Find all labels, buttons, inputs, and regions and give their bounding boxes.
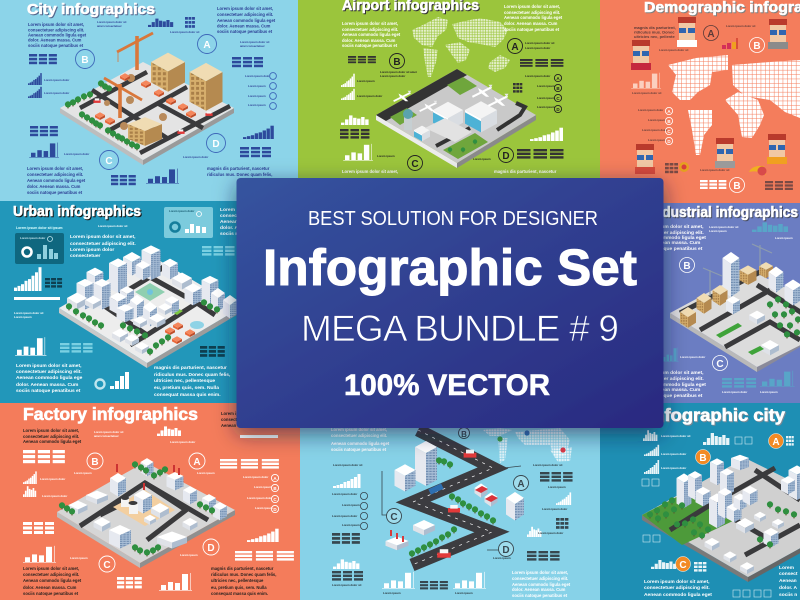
text blocks: Aenean commodo ligula eget	[27, 178, 86, 183]
light dashboard card: Lorem ipsum dolor	[169, 209, 195, 213]
text blocks: Lorem ipsum	[14, 315, 32, 319]
tiny icons and captions: Lorem ipsum dolor sit	[661, 434, 690, 438]
badge letters: D	[667, 139, 671, 144]
badge letters: C	[390, 512, 398, 523]
text blocks: Aenean commodo ligula eget	[23, 439, 82, 444]
text blocks: sociis natoque penatibus et	[638, 393, 703, 399]
tiny captions: Lorem ipsum dolor	[44, 78, 70, 82]
tiny captions: Lorem ipsum dolor	[44, 91, 70, 95]
dark tables	[332, 472, 573, 589]
orange badges	[676, 434, 784, 572]
text blocks: Lorem ipsum dolor sit amet,	[638, 370, 704, 376]
text blocks: Lorem ipsum dolor sit amet,	[638, 224, 704, 230]
tiny captions: Lorem ipsum dolor	[170, 440, 196, 444]
badge letters: C	[105, 156, 113, 167]
tiny captions: Lorem ipsum dolor sit	[94, 430, 123, 434]
circle badges	[87, 453, 279, 572]
text blocks: sociis natoque penatibus et	[23, 591, 79, 596]
text blocks: Lorem ipsum dolor sit ipsum	[16, 226, 63, 230]
badge letters: B	[81, 55, 89, 66]
tiny captions: Lorem ipsum dolor	[332, 492, 358, 496]
panel: urban infographics	[0, 201, 240, 403]
text blocks: Aenean commodo ligula eget	[504, 15, 563, 20]
avatar portraits	[631, 17, 788, 174]
text blocks: ultricies nec, pellentesque	[211, 578, 264, 583]
tiny captions: Lorem ipsum	[70, 556, 88, 560]
badge letters: B	[667, 119, 671, 124]
text blocks: sociis natoque penatibus et	[217, 29, 273, 34]
text blocks: magnis dis parturient, nascetur	[494, 169, 557, 174]
tiny captions: Lorem ipsum	[248, 94, 266, 98]
badge letters: D	[502, 545, 510, 556]
text blocks: Aenean commodo ligula eget	[28, 32, 87, 38]
eyebrow heading: BEST SOLUTION FOR DESIGNER	[308, 208, 598, 230]
text blocks: Lorem ipsum dolor sit amet,	[504, 4, 560, 9]
small charts and tables	[333, 474, 571, 589]
badge letters: C	[103, 560, 111, 571]
text blocks: Lorem ipsum dolor sit amet,	[331, 427, 387, 432]
text blocks: consectetuer	[221, 417, 247, 422]
text blocks: Lorem ipsum dolor sit amet,	[27, 166, 83, 171]
text blocks: consectetuer adipiscing elit.	[638, 376, 704, 382]
isometric buildings and vehicles	[386, 441, 524, 558]
text blocks: consectetuer adipiscing elit.	[331, 433, 387, 438]
small charts and tables	[341, 74, 563, 161]
badge letters: C	[716, 359, 724, 370]
circle badges	[704, 26, 718, 40]
text blocks: consectetuer adipiscing elit.	[638, 230, 704, 236]
text blocks: consectetuer adipiscing elit.	[504, 10, 560, 15]
text blocks: Lorem ipsum dolor sit amet,	[23, 566, 79, 571]
tiny captions: Lorem ipsum dolor sit amet	[380, 70, 417, 74]
text blocks: sociis natoque penatibus et	[638, 246, 703, 252]
badge letters: B	[699, 453, 707, 464]
circle badges A B C D	[390, 38, 562, 170]
tiny captions: Lorem ipsum	[760, 390, 778, 394]
circle badges A B C D	[76, 34, 276, 170]
tiny captions: Lorem ipsum	[255, 506, 273, 510]
text blocks: consectetuer adipiscing elit.	[644, 585, 710, 591]
text blocks: dolor. Aenean massa. Cum	[638, 387, 701, 393]
badge letters: A	[273, 476, 277, 481]
badge letters: B	[273, 486, 277, 491]
badge letters: A	[511, 42, 519, 53]
text blocks: dolor. A	[779, 585, 797, 591]
text blocks	[27, 6, 276, 195]
text blocks: Aenean commodo ligula eget	[342, 32, 401, 37]
text blocks: Aenean	[779, 578, 797, 584]
tiny captions: Lorem ipsum	[455, 591, 473, 595]
badge letters: C	[679, 560, 687, 571]
text block: ridiculus mus. Donec	[634, 30, 675, 34]
text blocks: sociis natoque penatibus et	[28, 43, 84, 48]
badge letters: C	[411, 159, 419, 170]
circle badges	[386, 428, 528, 556]
text block: ultricies nec, pellente	[634, 34, 675, 39]
tiny captions: Lorem ipsum	[537, 105, 555, 109]
text blocks: magnis dis parturient, nascetur	[211, 566, 274, 571]
text blocks: consequat massa quis enim.	[154, 392, 221, 398]
text blocks: Aenean commodo ligula eget	[217, 18, 276, 23]
isometric construction site	[60, 33, 234, 165]
badge letters: D	[556, 107, 560, 112]
text blocks: Lorem ipsum dolor sit amet,	[644, 579, 710, 585]
text blocks: eu, pretium quis, sem. Nulla	[211, 585, 267, 590]
world map dots	[412, 17, 510, 77]
panel: industrial infographics	[240, 203, 800, 403]
dark dashboard card: Lorem ipsum dolor	[20, 236, 46, 240]
text blocks: sociis natoque penatibus et	[504, 27, 560, 32]
text blocks: Lorem ipsum dolor sit amet,	[217, 6, 273, 11]
text blocks: consectetuer adipiscing elit.	[28, 28, 84, 32]
text blocks: sociis natoque penatibus et	[512, 593, 568, 598]
list badges	[360, 466, 521, 550]
text blocks: sociis natoque penatibus et	[27, 190, 83, 195]
tiny captions: Lorem ipsum dolor	[680, 355, 706, 359]
badge letters: A	[203, 40, 211, 51]
tiny captions: Lorem ipsum	[197, 471, 215, 475]
panel: airport infographics	[298, 0, 600, 201]
tiny captions: Lorem ipsum dolor sit	[533, 463, 562, 467]
text blocks: Lorem ipsum dolor sit amet,	[70, 234, 136, 240]
tiny captions: Lorem ipsum dolor	[380, 74, 406, 78]
tiny captions: Lorem ipsum dolor	[357, 94, 383, 98]
text blocks: Aenean commodo ligula ege	[16, 375, 83, 381]
badge letters: C	[667, 129, 671, 134]
text blocks: Aenean commodo ligula eget	[638, 382, 706, 388]
text blocks: Lorem ipsum dolor sit amet,	[342, 169, 398, 174]
tiny captions	[332, 463, 568, 595]
white badges	[665, 38, 764, 192]
badge letters: D	[502, 151, 510, 162]
text block: Lorem ipsum dolor	[642, 128, 668, 132]
badge letters: C	[273, 497, 277, 502]
teal charts	[662, 222, 795, 388]
zigzag road	[412, 430, 493, 565]
tiny captions: Lorem ipsum dolor sit	[240, 40, 269, 44]
text blocks: sociis natoque penatibus et	[331, 447, 387, 452]
badge letters: B	[556, 86, 560, 91]
tiny captions: Lorem ipsum	[537, 96, 555, 100]
title: city infographics: City infographics	[28, 3, 156, 19]
badge letters: A	[193, 457, 201, 468]
text blocks: sociis n	[220, 231, 238, 237]
isometric industrial district	[670, 244, 800, 372]
tiny captions: Lorem ipsum dolor	[332, 514, 358, 518]
small charts	[643, 430, 794, 572]
text blocks: Lorem	[779, 565, 795, 571]
text blocks: dolor. Aenean massa. Cum	[638, 240, 701, 246]
tiny captions: Lorem ipsum	[537, 84, 555, 88]
text blocks: consectetuer adipiscing elit.	[23, 572, 79, 577]
isometric city district	[642, 455, 800, 582]
badge letters: B	[461, 430, 467, 439]
tiny captions: Lorem ipsum	[248, 103, 266, 107]
text blocks	[14, 207, 239, 398]
tiny captions: Lorem ipsum dolor	[525, 74, 551, 78]
tiny captions: Lorem ipsum dolor	[722, 390, 748, 394]
badge letters: B	[753, 41, 761, 52]
tiny captions: Lorem ipsum	[180, 553, 198, 557]
tiny captions: Lorem ipsum	[383, 591, 401, 595]
tiny captions: Lorem ipsum dolor sit	[170, 30, 199, 34]
text blocks: ultricies nec, pellentesque	[154, 378, 215, 384]
tiny captions: Lorem ipsum dolor sit	[525, 41, 554, 45]
text blocks: Aenean commodo ligula eget	[644, 592, 712, 598]
tiny captions: Lorem ipsum dolor	[538, 531, 564, 535]
badge letters: D	[212, 139, 220, 150]
text blocks: consectetuer adipiscing elit.	[16, 369, 82, 375]
text blocks: Lorem ipsum dolor sit	[14, 311, 43, 315]
badge letters	[390, 430, 525, 556]
tiny captions: amet consectetuer	[240, 44, 266, 48]
vector tagline: 100% VECTOR	[344, 369, 550, 402]
title: infographic city: Infographic city	[649, 406, 786, 426]
badge letters	[91, 457, 277, 571]
tiny captions: Lorem ipsum	[775, 236, 793, 240]
text blocks	[23, 411, 276, 596]
tiny captions: Lorem ipsum dolor	[245, 74, 271, 78]
text blocks: dolor. Aenean massa. Cum	[512, 587, 566, 592]
text blocks: Lorem ipsum dolor	[70, 247, 114, 253]
badge letters: A	[556, 76, 560, 81]
text blocks: dolor. A	[220, 225, 238, 231]
tiny captions: Lorem ipsum dolor sit	[709, 225, 738, 229]
badge letters	[393, 42, 560, 170]
isometric airport	[376, 69, 536, 168]
panel: city infographics	[0, 0, 298, 201]
tiny captions: Lorem ipsum	[342, 503, 360, 507]
centre title card	[236, 178, 664, 428]
tiny captions: Lorem ipsum dolor	[525, 46, 551, 50]
text blocks: sociis natoque penatibus et	[16, 388, 81, 394]
badge letters: B	[683, 261, 691, 272]
text blocks	[644, 565, 798, 598]
badge letters: A	[667, 109, 671, 114]
tiny captions: Lorem ipsum	[377, 154, 395, 158]
circle badges	[680, 258, 728, 370]
tiny captions: Lorem ipsum dolor	[64, 152, 90, 156]
tiny captions: Lorem ipsum dolor	[42, 494, 68, 498]
light dashboard card	[164, 207, 213, 238]
tiny captions: Lorem ipsum dolor sit	[97, 20, 126, 24]
tiny captions: amet consectetuer	[97, 24, 123, 28]
tiny captions: Lorem ipsum	[473, 157, 491, 161]
text blocks: consectetuer	[70, 253, 101, 259]
tiny captions: Lorem ipsum	[342, 523, 360, 527]
text blocks: dolor. Aenean massa. Cum	[23, 585, 77, 590]
text blocks: Aenean	[220, 219, 238, 225]
text blocks: dolor. Aenean massa. Cum	[342, 38, 396, 43]
text block: Lorem ipsum dolor sit	[700, 168, 729, 172]
text blocks: dolor. Aenean massa. Cum	[217, 24, 271, 28]
text blocks: Lorem	[220, 207, 236, 213]
text blocks: Lorem ipsum dolor sit	[98, 224, 127, 228]
text blocks	[342, 4, 563, 174]
tiny captions: Lorem ipsum dolor	[542, 507, 568, 511]
text blocks: consect	[220, 213, 239, 219]
pixel world map	[668, 55, 800, 155]
text block: Lorem ipsum	[648, 118, 666, 122]
tiny captions: Lorem ipsum	[74, 471, 92, 475]
text blocks	[331, 427, 571, 598]
text blocks: sociis n	[779, 592, 797, 598]
tiny captions: Lorem ipsum dolor	[40, 477, 66, 481]
tiny captions	[357, 41, 555, 161]
dark dashboard card	[15, 233, 64, 264]
panel: infographic city	[600, 403, 800, 600]
title: city infographics: City infographics	[27, 2, 155, 18]
text blocks: consectetuer adipiscing elit.	[70, 241, 136, 247]
badge letters	[81, 40, 220, 167]
text blocks: Lorem ipsum dolor sit amet,	[28, 22, 84, 27]
text blocks: dolor. Aenean massa. Cum	[28, 38, 82, 42]
text blocks: ridiculus mus. Donec quam felis,	[211, 572, 276, 577]
panel: demographic infographics	[600, 0, 800, 203]
text blocks: consectetuer adipiscing elit.	[23, 434, 79, 439]
tiny icons and captions: Lorem ipsum dolor	[661, 452, 687, 456]
text blocks: Lorem ipsum	[221, 411, 248, 416]
badge letters	[667, 29, 761, 192]
tiny captions: Lorem ipsum dolor	[247, 496, 273, 500]
tiny captions: Lorem ipsum	[248, 84, 266, 88]
text blocks: Aenean commodo ligula eget	[512, 582, 571, 587]
text blocks: dolor. Aenean massa. Cum	[16, 382, 79, 388]
tables	[665, 163, 793, 190]
tiny captions: Lorem ipsum	[357, 79, 375, 83]
badge letters: A	[517, 479, 525, 490]
text blocks: consectetuer adipiscing elit.	[342, 27, 398, 32]
charts	[631, 38, 766, 176]
text blocks: sociis natoque penatibus et	[342, 43, 398, 48]
text block: Lorem ipsum dolor	[638, 108, 664, 112]
text blocks: eu, pretium quis, sem. Nulla	[154, 385, 219, 391]
badge letters: D	[273, 507, 277, 512]
text block: Lorem ipsum dolor sit	[726, 24, 755, 28]
text block: Lorem ipsum	[648, 138, 666, 142]
badge letters: A	[772, 437, 780, 448]
text blocks: consectetuer adipiscing elit.	[512, 576, 568, 581]
text blocks: Aenean commodo ligula eget	[331, 441, 390, 446]
tiny captions: Lorem ipsum	[254, 485, 272, 489]
title: urban infographics: Urban infographics	[13, 204, 141, 220]
tiny captions: Lorem ipsum	[493, 556, 511, 560]
text blocks: magnis dis parturient, nascetur	[154, 365, 227, 371]
text blocks: Aenean commodo ligula eget	[638, 235, 706, 241]
text block: magnis dis parturient,	[634, 25, 676, 30]
text blocks: dolor. Aenean massa. Cum	[27, 184, 81, 189]
text blocks: magnis dis parturient, nascetur	[207, 166, 270, 171]
text blocks	[638, 224, 706, 399]
small charts and tables	[14, 246, 235, 389]
badge letters: B	[733, 181, 741, 192]
small charts and tables	[23, 426, 294, 591]
tiny captions: Lorem ipsum dolor sit	[333, 463, 362, 467]
text block: Lorem ipsum dolor sit	[659, 48, 688, 52]
dotted world map with pins	[483, 428, 572, 463]
badge letters: D	[207, 543, 215, 554]
text blocks: Lorem ipsum dolor sit amet,	[23, 428, 79, 433]
tiny captions: Lorem ipsum	[709, 229, 727, 233]
text blocks: Lorem ipsum dolor sit amet,	[16, 363, 82, 369]
badge letters: B	[91, 457, 99, 468]
text blocks: dolor. Aenean massa. Cum	[504, 21, 558, 26]
panel: factory infographics	[0, 403, 300, 600]
tiny icons and captions: Lorem ipsum dolor	[661, 466, 687, 470]
text block	[632, 24, 755, 172]
panel: road infographics	[300, 403, 600, 600]
text blocks: consequat massa quis enim.	[211, 591, 268, 596]
tiny captions: Lorem ipsum dolor sit	[332, 583, 361, 587]
isometric urban district	[59, 245, 240, 368]
tiny captions	[44, 20, 271, 159]
tiny captions	[680, 225, 793, 394]
title: urban infographics: Urban infographics	[14, 205, 142, 221]
badge letters: A	[707, 29, 715, 40]
text blocks: Aenean commodo	[221, 423, 258, 428]
text blocks: ridiculus mus. Donec quam felis,	[207, 172, 272, 177]
text blocks: consect	[779, 571, 798, 577]
main heading: Infographic Set	[263, 239, 637, 296]
text blocks: consectetuer adipiscing elit.	[217, 12, 273, 17]
text block: Lorem ipsum dolor sit	[632, 91, 661, 95]
text blocks: Aenean commodo ligula eget	[23, 578, 82, 583]
text blocks: Lorem ipsum dolor sit amet,	[342, 21, 398, 26]
badge letters	[679, 437, 780, 571]
text blocks: consectetuer adipiscing elit.	[27, 172, 83, 177]
isometric factory district	[57, 458, 235, 568]
badge letters: B	[393, 57, 401, 68]
tiny captions: Lorem ipsum dolor	[243, 475, 269, 479]
title: factory infographics: Factory infographics	[23, 404, 198, 424]
tiny captions: Lorem ipsum	[548, 485, 566, 489]
badge letters	[683, 261, 724, 370]
tiny captions	[40, 430, 273, 560]
title: infographic city: Infographic city	[648, 405, 785, 425]
tiny captions: amet consectetuer	[94, 434, 120, 438]
tiny captions: Lorem ipsum dolor	[183, 155, 209, 159]
text blocks: Lorem ipsum dolor sit amet,	[512, 570, 568, 575]
badge letters: C	[556, 96, 560, 101]
subheading: MEGA BUNDLE # 9	[301, 308, 619, 349]
tiny icons and captions	[642, 434, 771, 597]
small charts and tables	[28, 17, 274, 185]
text blocks: ridiculus mus. Donec quam felis,	[154, 372, 231, 378]
